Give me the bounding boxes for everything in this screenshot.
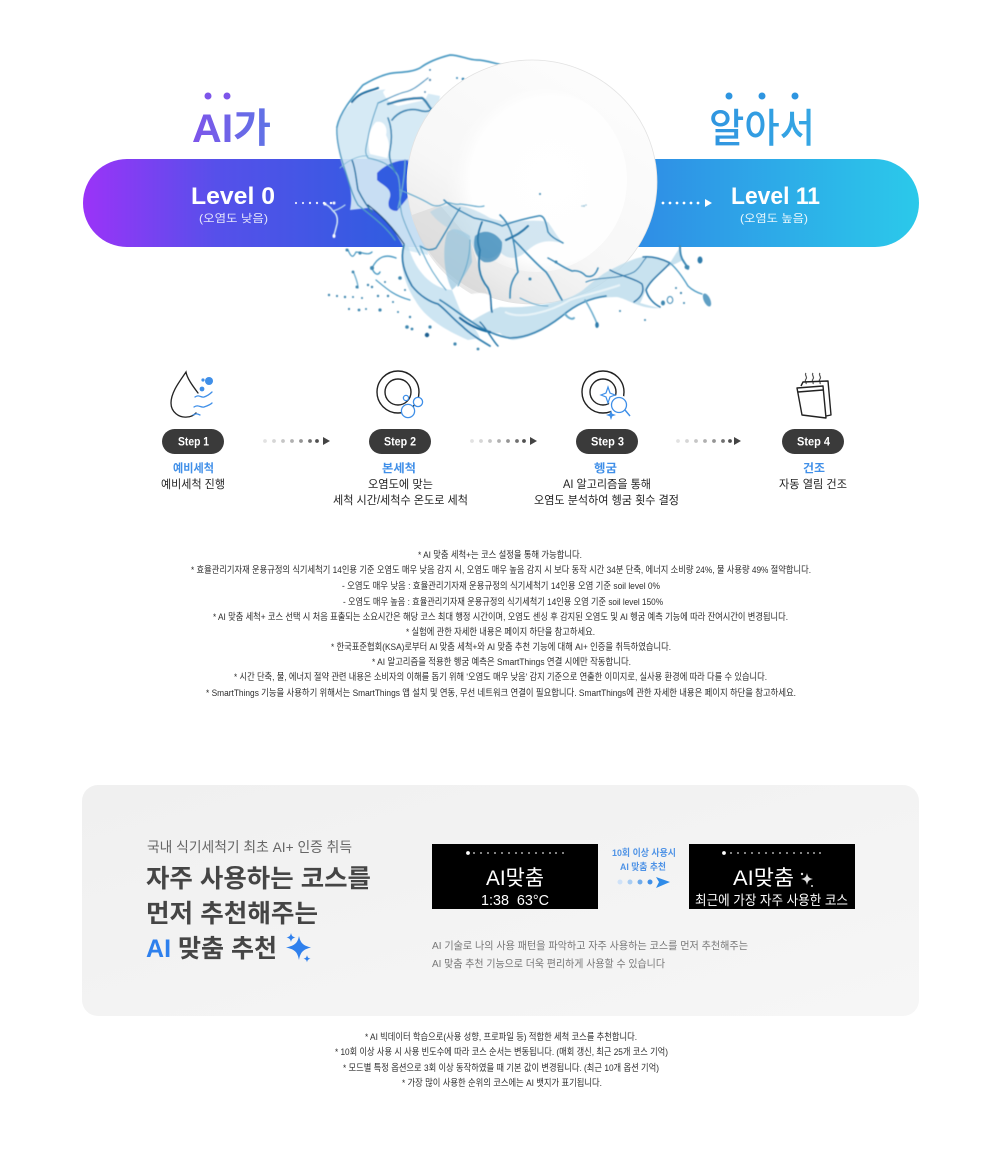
panel description: AI 기술로 나의 사용 패턴을 파악하고 자주 사용하는 코스를 먼저 추천해주는 — [432, 939, 748, 952]
plate — [407, 60, 657, 304]
label: Level 0: (오염도 낮음) — [199, 212, 268, 225]
icon: open dishwasher steam — [797, 373, 831, 418]
panel heading: 자주 사용하는 코스를 — [146, 865, 371, 893]
step 1 badge: Step 1 — [178, 436, 210, 448]
panel heading: 먼저 추천해주는 — [146, 900, 318, 928]
label: Level 0: Level 0 — [191, 183, 275, 210]
footnotes: bottom: * 모드별 특정 옵션으로 3회 이상 동작하였을 때 기본 값이 변경됩니다. (최근 10개 옵션 기억) — [343, 1062, 659, 1074]
footnotes: top: * AI 맞춤 세척+는 코스 설정을 통해 가능합니다. — [418, 549, 582, 561]
label: Level 11 — [731, 183, 820, 225]
arrow: step 2 to 3 — [470, 437, 537, 445]
recommendation arrow: 10회 이상 사용시 — [612, 847, 676, 859]
footnotes: top: * 실험에 관한 자세한 내용은 페이지 하단을 참고하세요. — [406, 626, 595, 638]
step 1 text: 예비세척 — [173, 461, 214, 475]
display: after — [689, 844, 855, 909]
arrow: step 3 to 4 — [676, 437, 741, 445]
display: before: 1:38 63°C — [481, 893, 549, 909]
droplets — [328, 193, 713, 350]
display: after: 최근에 가장 자주 사용한 코스 — [695, 893, 848, 908]
footnotes: top: * SmartThings 기능을 사용하기 위해서는 SmartThings 앱 설치 및 연동, 무선 네트워크 연결이 필요합니다. SmartThings에 관한 자세한 내용은 페이지 하단을 참고하세요. — [206, 687, 796, 699]
display: before: AI맞춤 — [486, 867, 544, 890]
step 2 text: 본세척 — [382, 461, 416, 475]
step 1 text — [161, 461, 225, 491]
footnotes: top: - 오염도 매우 낮음 : 효율관리기자재 운용규정의 식기세척기 14인용 오염 기준 soil level 0% — [342, 581, 660, 592]
label: Level 11: (오염도 높음) — [740, 212, 808, 225]
water sheet behind plate — [324, 55, 503, 255]
footnotes: bottom: * 가장 많이 사용한 순위의 코스에는 AI 뱃지가 표기됩니다. — [402, 1077, 602, 1089]
step 1: pre-wash — [161, 372, 225, 491]
arrow: dotted left — [295, 202, 332, 204]
illustration: plate with water splash — [324, 55, 713, 350]
strands — [348, 190, 702, 346]
footnotes: bottom: * 10회 이상 사용 시 사용 빈도수에 따라 코스 순서는 변동됩니다. (매회 갱신, 최근 25개 코스 기억) — [335, 1046, 668, 1058]
display: after: AI맞춤 — [733, 867, 794, 890]
icon: plate with magnifier — [582, 371, 630, 420]
step 4 text: 자동 열림 건조 — [779, 478, 847, 491]
step 3 text: AI 알고리즘을 통해 — [563, 477, 651, 491]
footnotes: top: * AI 알고리즘을 적용한 헹굼 예측은 SmartThings 연결 시에만 작동합니다. — [372, 656, 631, 668]
water splash in front of plate — [328, 190, 713, 350]
arrow: step 1 to 2 — [263, 437, 330, 445]
step 2: main wash — [333, 371, 468, 507]
label: Level 11: Level 11 — [731, 183, 820, 210]
footnotes: top: * 한국표준협회(KSA)로부터 AI 맞춤 세척+와 AI 맞춤 추천 기능에 대해 AI+ 인증을 취득하였습니다. — [331, 641, 671, 653]
step 3 text: 오염도 분석하여 헹굼 횟수 결정 — [534, 493, 679, 507]
step 1 text: 예비세척 진행 — [161, 478, 225, 491]
panel eyebrow: 국내 식기세척기 최초 AI+ 인증 취득 — [147, 839, 352, 855]
step 2 text: 오염도에 맞는 — [368, 478, 433, 491]
panel description — [432, 939, 748, 970]
label: Level 0 — [191, 183, 275, 225]
footnotes: top — [191, 549, 811, 699]
recommendation arrow: AI 맞춤 추천 — [620, 861, 666, 873]
display: before — [432, 844, 598, 909]
icon: water drop — [171, 372, 213, 417]
step 2 badge: Step 2 — [384, 436, 416, 448]
footnotes: top: * 효율관리기자재 운용규정의 식기세척기 14인용 기준 오염도 매우 낮음 감지 시, 오염도 매우 높음 감지 시 보다 동작 시간 34분 단축, 에너지 소비량 24%, 물 사용량 49% 절약합니다. — [191, 564, 811, 576]
panel heading — [146, 865, 371, 963]
step 3 text: 헹굼 — [594, 461, 617, 475]
panel: AI recommendation — [82, 785, 919, 1016]
step 4 text — [779, 461, 847, 491]
recommendation arrow — [612, 847, 676, 888]
heading: AI가: AI가 — [192, 107, 271, 151]
step 4 text: 건조 — [803, 461, 825, 475]
step 3 text — [534, 461, 679, 507]
step 3 badge: Step 3 — [591, 436, 624, 448]
step 2 text: 세척 시간/세척수 온도로 세척 — [333, 494, 468, 507]
heading: 알아서: 알아서 — [709, 107, 815, 151]
footnotes: bottom — [335, 1031, 668, 1089]
footnotes: top: * AI 맞춤 세척+ 코스 선택 시 처음 표출되는 소요시간은 해당 코스 최대 행정 시간이며, 오염도 센싱 후 감지된 오염도 및 AI 헹굼 예측 기능에 따라 잔여시간이 변경됩니다. — [213, 611, 788, 623]
step 4 badge: Step 4 — [797, 436, 831, 448]
icon: sparkles — [286, 933, 311, 962]
arrow: dotted right — [662, 199, 712, 207]
step 2 text — [333, 461, 468, 507]
footnotes: top: * 시간 단축, 물, 에너지 절약 관련 내용은 소비자의 이해를 돕기 위해 '오염도 매우 낮음' 감지 기준으로 연출한 이미지로, 실사용 환경에 따라 다를 수 있습니다. — [234, 671, 767, 683]
panel description: AI 맞춤 추천 기능으로 더욱 편리하게 사용할 수 있습니다 — [432, 957, 665, 970]
step 4: drying — [779, 373, 847, 491]
gradient level bar — [83, 159, 919, 247]
footnotes: top: - 오염도 매우 높음 : 효율관리기자재 운용규정의 식기세척기 14인용 오염 기준 soil level 150% — [343, 597, 663, 608]
footnotes: bottom: * AI 빅데이터 학습으로(사용 성향, 프로파일 등) 적합한 세척 코스를 추천합니다. — [365, 1031, 637, 1043]
panel heading: AI 맞춤 추천 — [146, 935, 277, 963]
translucent sheets — [444, 229, 472, 290]
step 3: rinse — [534, 371, 679, 507]
step 3 badge — [576, 429, 638, 454]
icon: plate with bubbles — [377, 371, 423, 418]
